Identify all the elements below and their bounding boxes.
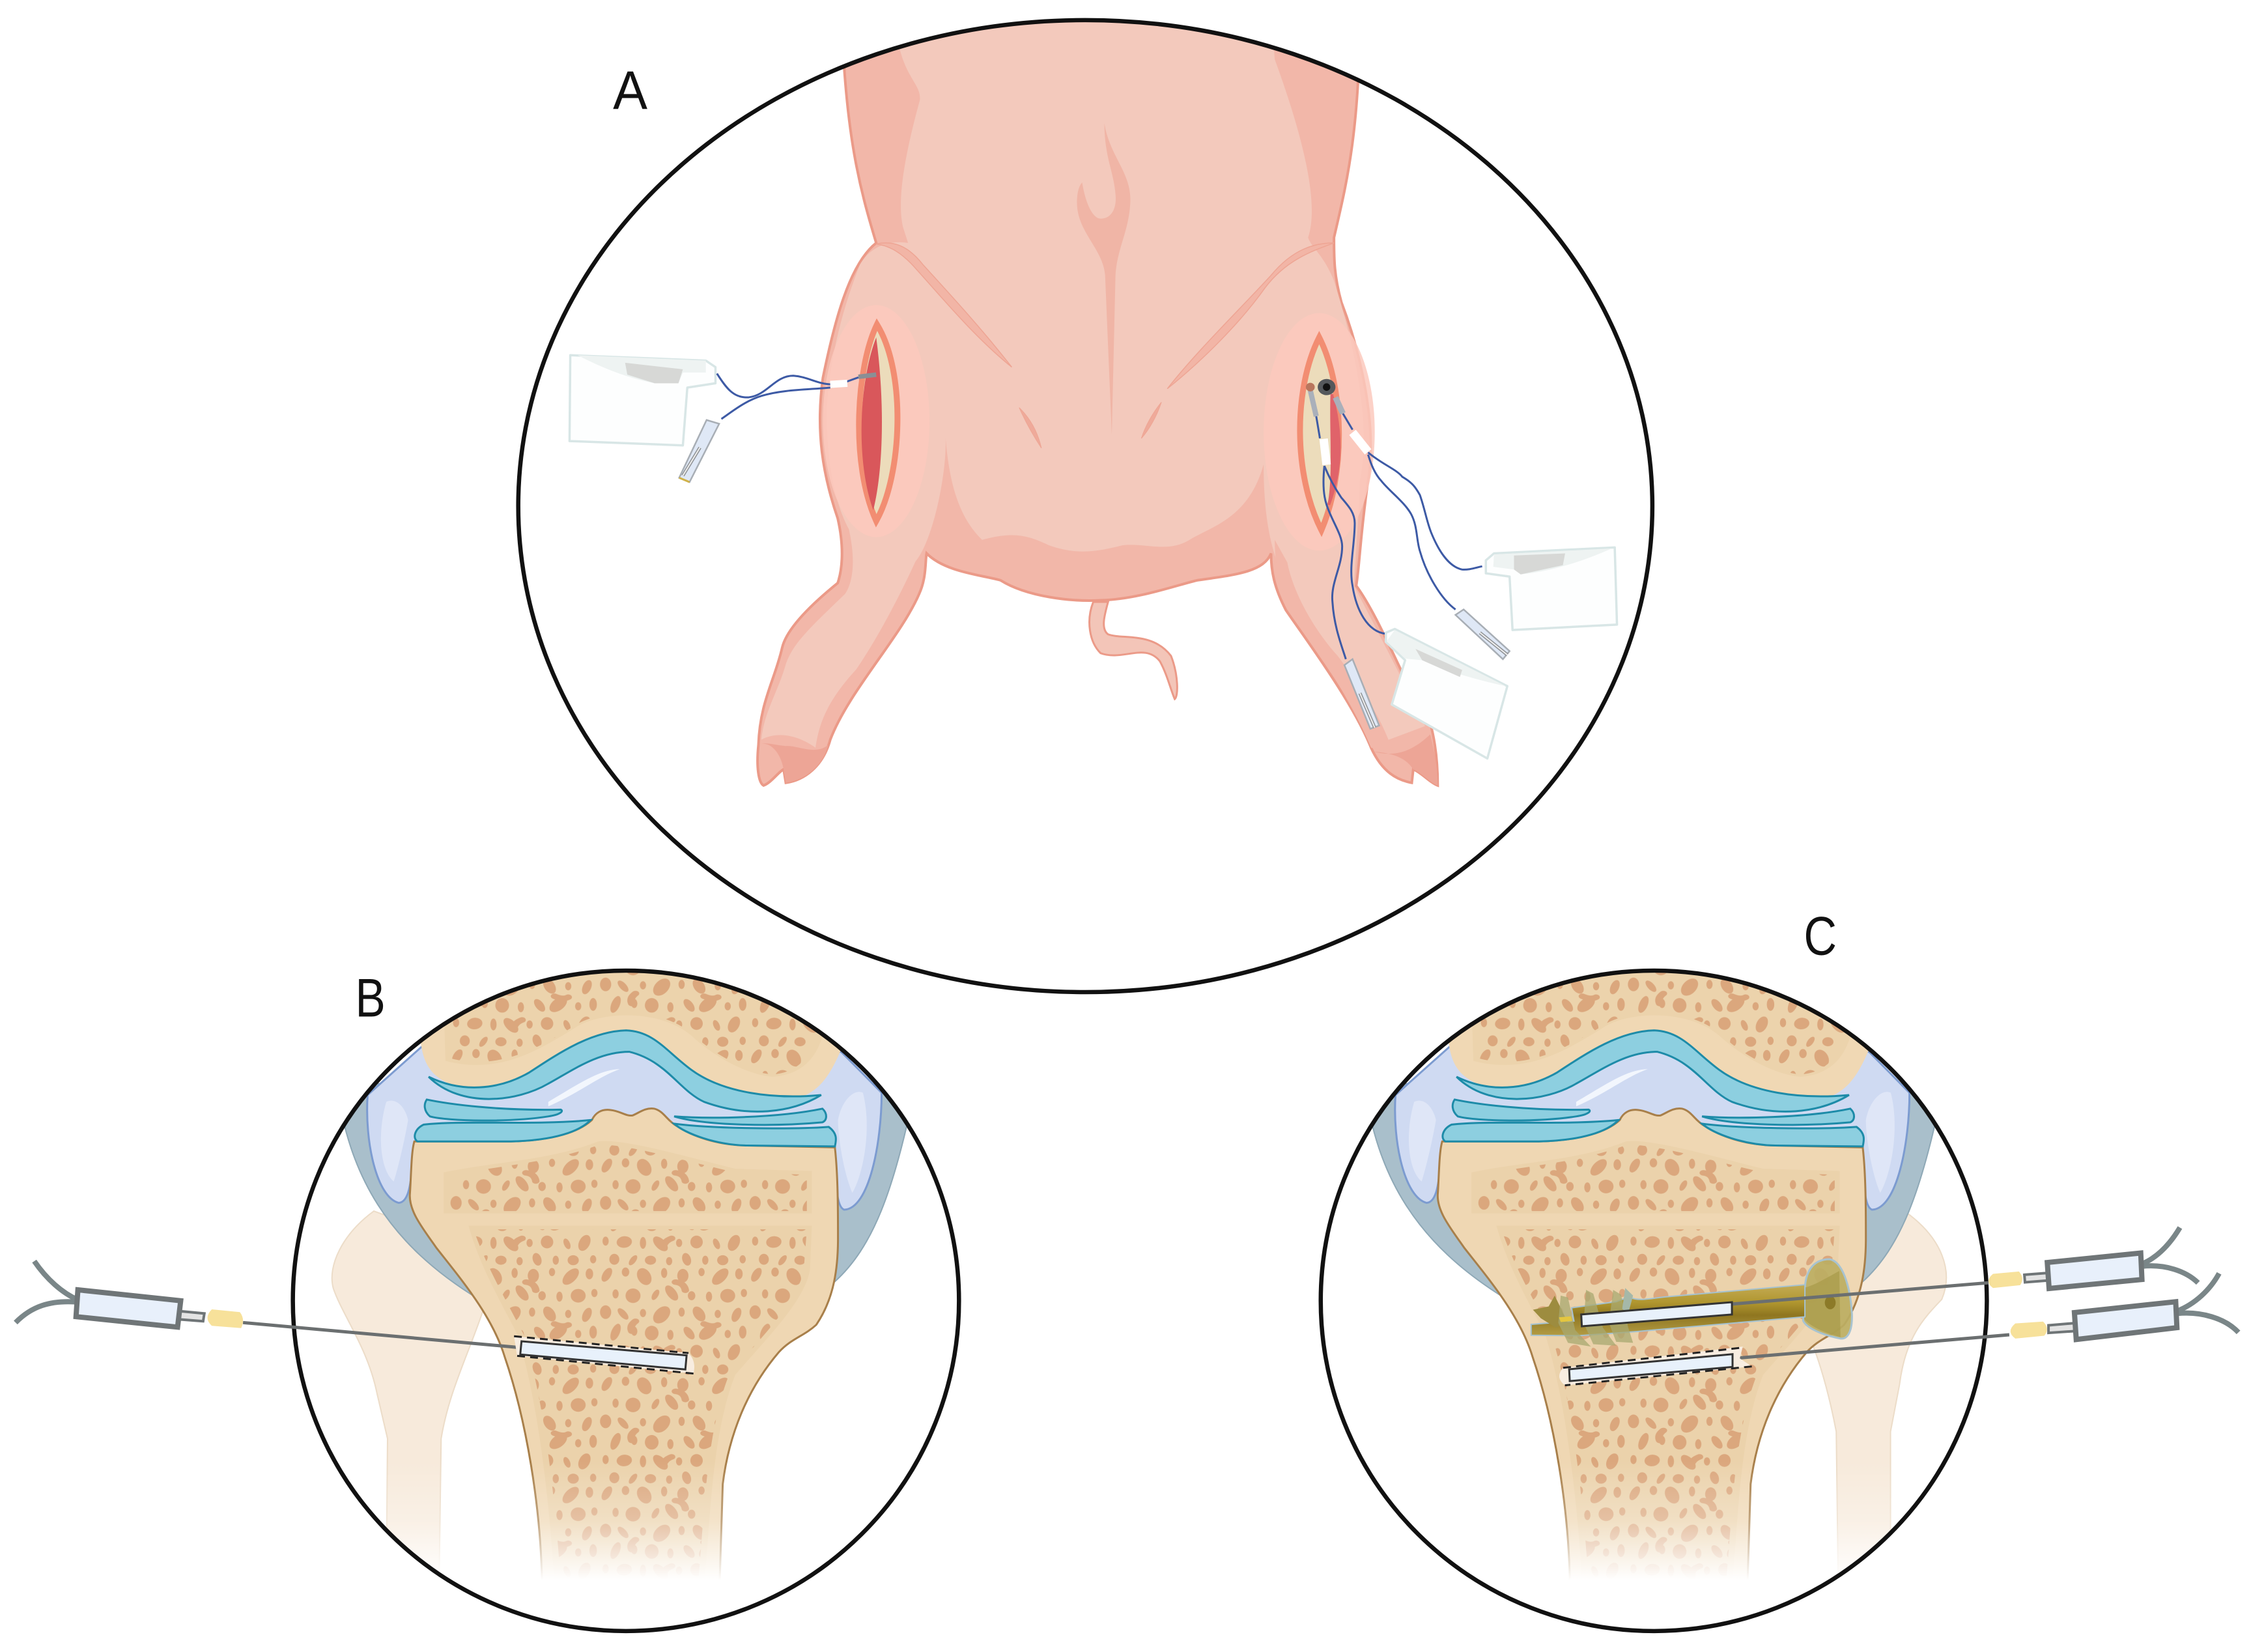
panel C outline: [1321, 971, 1987, 1631]
knee illustration C: [1277, 956, 2087, 1652]
panel B outline: [293, 971, 959, 1631]
sensor probe B: [16, 1261, 694, 1374]
tail: [1090, 602, 1177, 699]
left hoof: [761, 743, 828, 783]
right lower vial: [1344, 659, 1379, 729]
panel A outline: [518, 20, 1652, 992]
right needles: [1310, 390, 1368, 465]
right lower sensor pad: [1386, 629, 1507, 758]
screw sites: [1306, 379, 1335, 395]
left incision: [859, 324, 898, 521]
fibula C: [1803, 1212, 1946, 1573]
panel B: knee with one sensor: [16, 956, 1059, 1652]
left vial: [679, 420, 719, 482]
right wires: [1316, 414, 1482, 659]
left needle: [830, 375, 876, 384]
label A: A: [613, 60, 647, 121]
screw: [1531, 1259, 1852, 1346]
fibula B: [332, 1211, 483, 1575]
label B: B: [356, 967, 386, 1028]
panel C: knee with screw and two sensors: [1277, 905, 2239, 1652]
right upper vial: [1456, 610, 1510, 659]
lower probe C: [1559, 1274, 2239, 1386]
left wires: [717, 373, 858, 419]
knee illustration B: [249, 956, 1059, 1652]
label C: C: [1804, 905, 1837, 967]
right hoof: [1373, 734, 1437, 786]
right upper sensor pad: [1486, 547, 1617, 630]
pig body illustration: [569, 11, 1617, 786]
right incision: [1300, 337, 1339, 530]
left sensor pad: [569, 355, 715, 446]
panel A: pig surgery overview: [518, 11, 1652, 992]
upper probe C: [1581, 1227, 2198, 1326]
